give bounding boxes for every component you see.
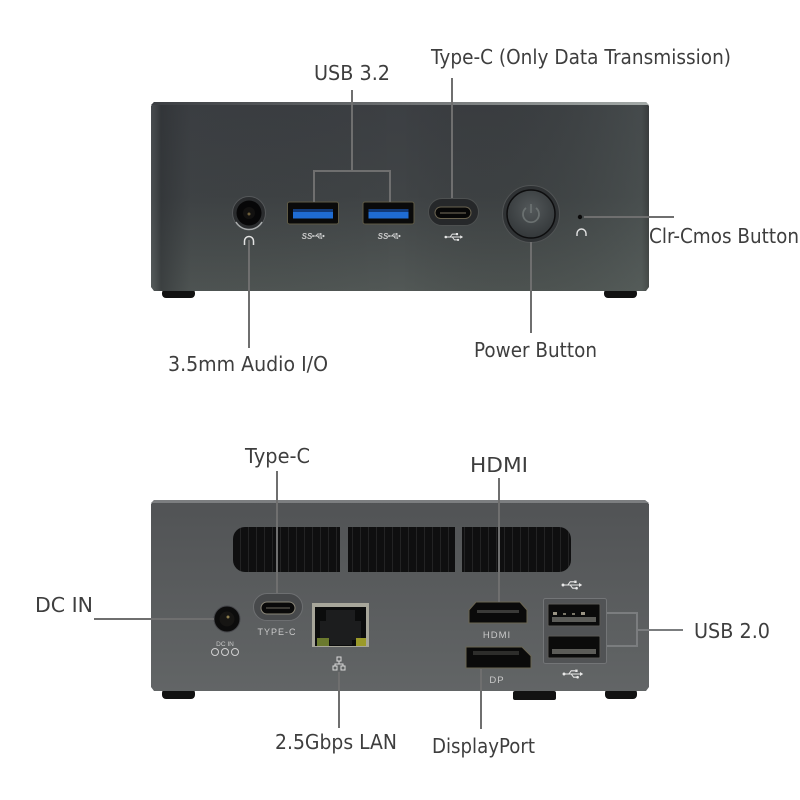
vent: right bbox=[462, 527, 571, 572]
connector: DC IN bbox=[94, 618, 214, 620]
label: rear Type-C: Type-C bbox=[244, 444, 310, 468]
port: 2.5G LAN bbox=[312, 603, 369, 670]
connector: front Type-C bbox=[451, 78, 453, 198]
port: DisplayPort bbox=[466, 647, 531, 686]
port: DC in bbox=[212, 606, 240, 656]
port: HDMI: HDMI bbox=[483, 630, 511, 641]
label: Type-C data: Type-C (Only Data Transmission) bbox=[430, 45, 731, 69]
connector: power bbox=[530, 242, 532, 333]
port: DC in: DC IN bbox=[216, 641, 234, 648]
port: rear Type-C bbox=[254, 594, 302, 637]
label: HDMI: HDMI bbox=[470, 453, 528, 477]
top edge highlight bbox=[151, 102, 649, 105]
foot: rear right bbox=[605, 689, 637, 699]
port: rear Type-C: TYPE-C bbox=[257, 627, 297, 637]
foot: front left bbox=[162, 289, 195, 298]
panel: rear view bbox=[94, 471, 683, 729]
label: audio: 3.5mm Audio I/O bbox=[168, 352, 328, 376]
device body: front bbox=[151, 102, 649, 291]
panel: front view bbox=[151, 78, 674, 348]
label: DisplayPort: DisplayPort bbox=[432, 734, 535, 758]
port: DisplayPort: DP bbox=[489, 675, 505, 686]
connector: USB 2.0 bbox=[607, 613, 683, 646]
port: USB 3.2 second: SS bbox=[378, 232, 389, 241]
port: USB 3.2 first: SS bbox=[302, 232, 313, 241]
connector: LAN bbox=[338, 672, 340, 728]
foot: front right bbox=[604, 289, 637, 298]
label: LAN: 2.5Gbps LAN bbox=[275, 730, 397, 754]
button: clear CMOS pinhole bbox=[577, 215, 586, 236]
top edge highlight bbox=[151, 500, 649, 503]
label: USB 3.2: USB 3.2 bbox=[314, 61, 390, 85]
connector: HDMI bbox=[498, 478, 500, 602]
button: power bbox=[502, 186, 560, 242]
port: HDMI bbox=[469, 602, 527, 641]
label: DC IN: DC IN bbox=[35, 593, 93, 617]
port: front Type-C bbox=[428, 198, 478, 241]
foot: rear left bbox=[162, 689, 195, 699]
connector: clear CMOS bbox=[584, 216, 674, 218]
label: power: Power Button bbox=[474, 338, 597, 362]
port: USB 3.2 first bbox=[288, 202, 338, 241]
label: USB 2.0: USB 2.0 bbox=[694, 619, 770, 643]
port: USB 3.2 second bbox=[363, 202, 414, 241]
connector: USB 3.2 bbox=[314, 90, 390, 202]
vent: left bbox=[233, 527, 340, 572]
connector: audio bbox=[248, 240, 250, 348]
port: audio jack bbox=[232, 196, 266, 245]
body side shading bbox=[151, 102, 649, 291]
vent: middle bbox=[348, 527, 455, 572]
port group: USB 2.0 bbox=[544, 581, 606, 678]
foot: rear middle bbox=[513, 691, 556, 700]
device body: rear bbox=[151, 500, 649, 691]
connector: rear Type-C bbox=[276, 471, 278, 593]
connector: DisplayPort bbox=[480, 669, 482, 729]
